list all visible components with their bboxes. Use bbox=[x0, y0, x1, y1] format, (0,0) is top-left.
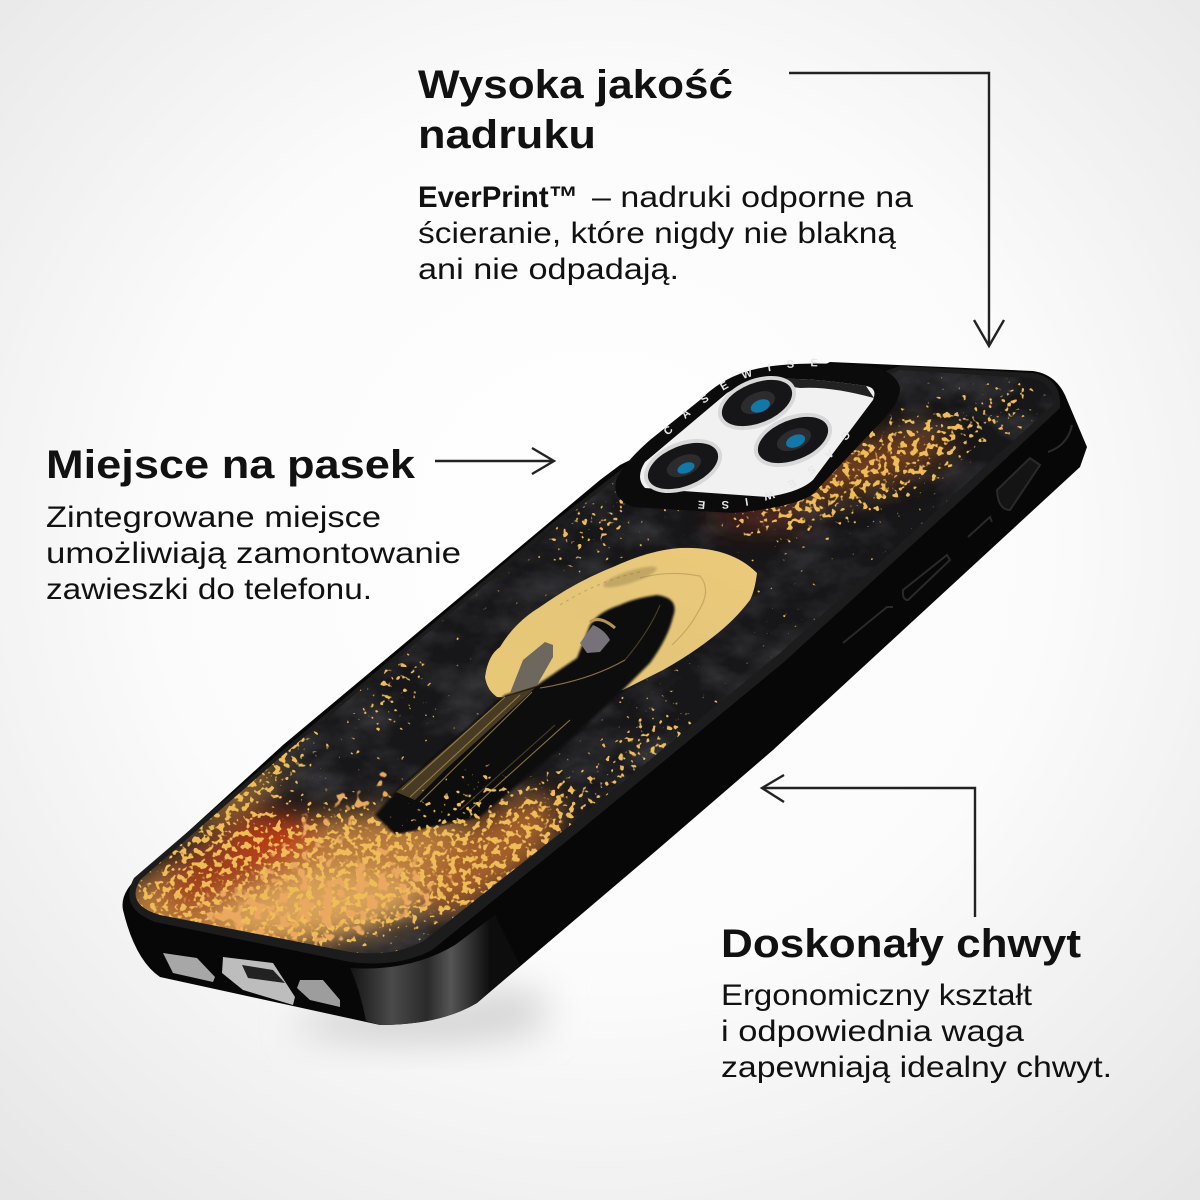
heading: Doskonały chwyt bbox=[721, 922, 1081, 966]
inner bumper lip bbox=[129, 366, 1060, 964]
bump lettering: CASEWISE bbox=[664, 358, 818, 434]
art gold speckles bbox=[138, 371, 1046, 954]
printed artwork bbox=[136, 370, 1052, 954]
window shadow bbox=[767, 379, 874, 398]
body text bbox=[46, 501, 461, 606]
body text: – nadruki odporne na bbox=[592, 181, 913, 214]
body text: EverPrint™ bbox=[418, 181, 578, 214]
body text: zawieszki do telefonu. bbox=[46, 573, 372, 606]
body text: Ergonomiczny kształt bbox=[721, 979, 1033, 1012]
callout: print quality bbox=[418, 63, 1004, 346]
phone case illustration bbox=[122, 358, 1087, 1025]
body text: Zintegrowane miejsce bbox=[46, 501, 381, 534]
body text: ścieranie, które nigdy nie blakną bbox=[418, 217, 896, 250]
case body bbox=[122, 362, 1087, 1025]
glossy bottom corner bbox=[350, 915, 520, 1025]
camera window bbox=[640, 379, 874, 497]
charging port bbox=[222, 957, 295, 1005]
body text: ani nie odpadają. bbox=[418, 253, 679, 286]
heading: Miejsce na pasek bbox=[46, 443, 416, 487]
bump frame bbox=[615, 364, 900, 513]
callout: grip bbox=[721, 775, 1112, 1084]
lens right bbox=[746, 402, 840, 478]
body text bbox=[418, 181, 913, 286]
art smoke bbox=[177, 370, 1053, 954]
arrow to grip bbox=[762, 775, 975, 917]
moon mottling bbox=[560, 572, 706, 645]
moon halo bbox=[485, 548, 757, 700]
body text: umożliwiają zamontowanie bbox=[46, 537, 461, 570]
robe hem speckles bbox=[390, 755, 520, 836]
arrow to strap slot bbox=[435, 448, 554, 474]
callout: strap slot bbox=[46, 443, 554, 606]
speaker right bbox=[297, 980, 340, 1007]
arrow to print bbox=[789, 73, 1004, 346]
sleeve bbox=[396, 688, 535, 800]
heading bbox=[418, 63, 733, 157]
heading: nadruku bbox=[418, 113, 596, 157]
hair band bbox=[590, 620, 615, 628]
speaker left bbox=[163, 953, 215, 982]
phone shadow bbox=[295, 987, 550, 1042]
side buttons bbox=[843, 425, 1072, 643]
lens left bbox=[636, 428, 730, 504]
robe gold strands bbox=[402, 605, 660, 810]
body text: i odpowiednia waga bbox=[721, 1015, 1024, 1048]
body text: zapewniają idealny chwyt. bbox=[721, 1051, 1112, 1084]
bottom ports bbox=[163, 953, 340, 1007]
figure robe bbox=[375, 595, 675, 835]
camera bump: CASEWISE bbox=[698, 432, 850, 509]
art warm glow bbox=[101, 418, 958, 985]
face bbox=[580, 625, 610, 653]
art dark base bbox=[120, 360, 1070, 960]
hands bbox=[510, 642, 553, 693]
body text bbox=[721, 979, 1112, 1084]
art orange speckles bbox=[179, 771, 454, 946]
camera bump bbox=[616, 358, 900, 513]
lens top bbox=[710, 365, 804, 441]
heading: Wysoka jakość bbox=[418, 63, 733, 107]
